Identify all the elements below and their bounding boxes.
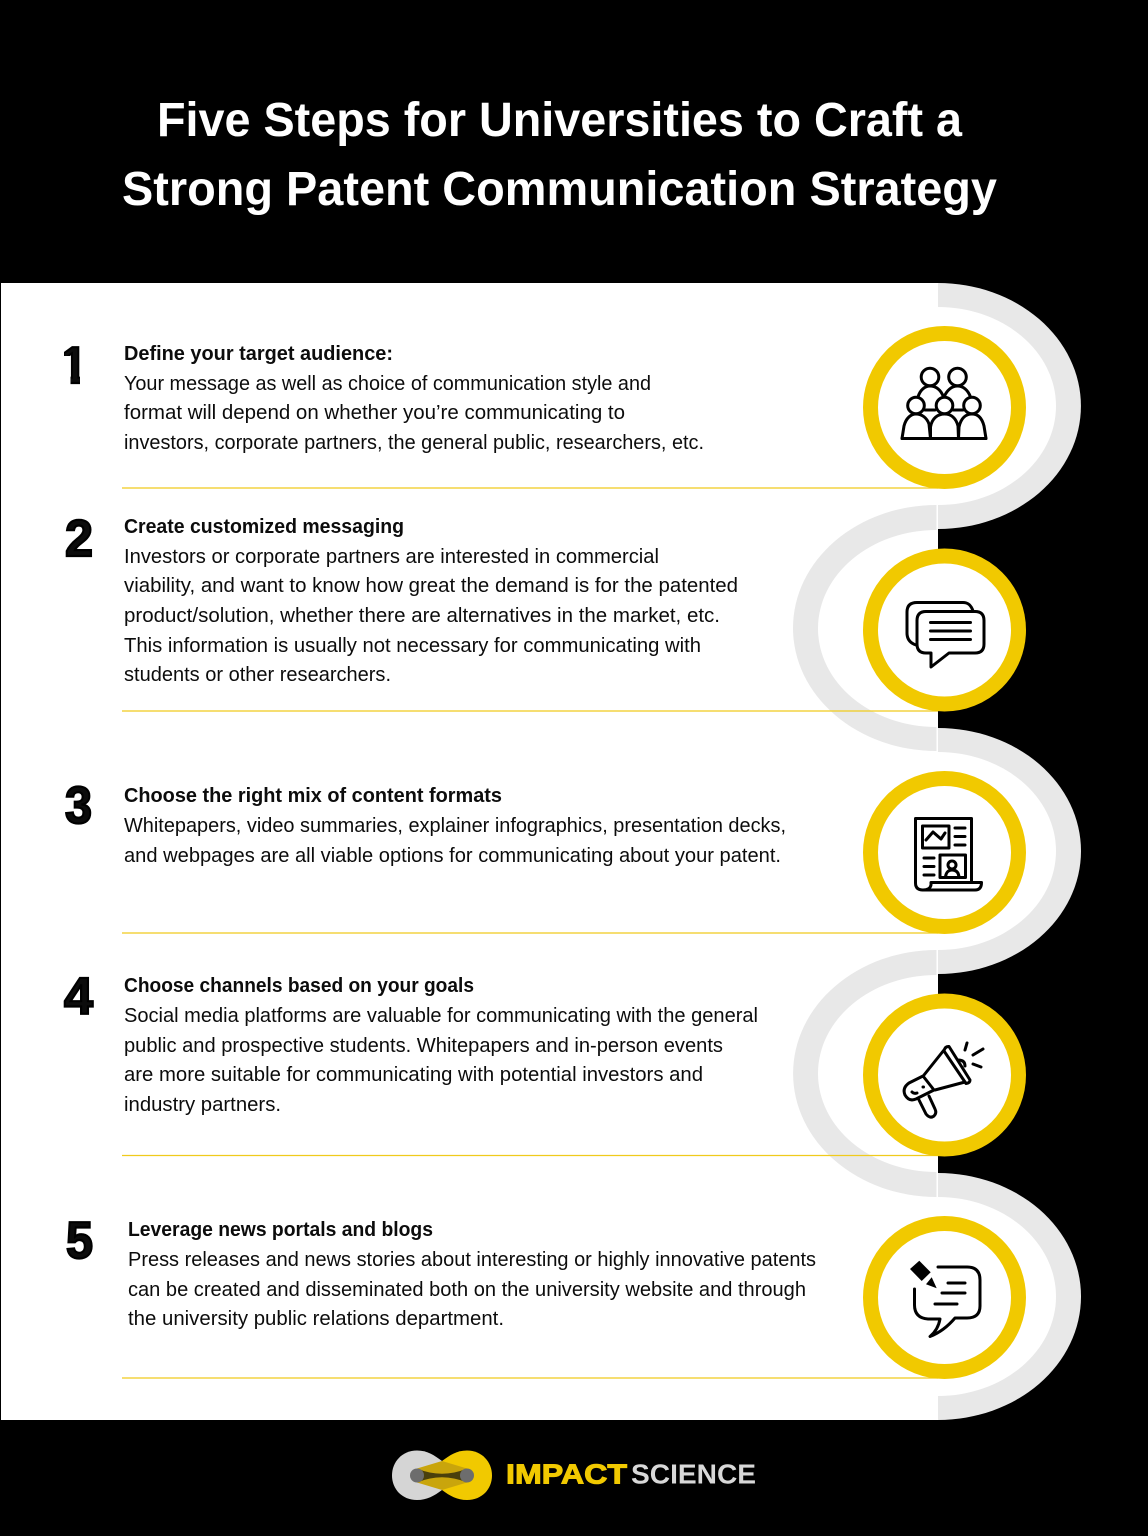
logo wordmark: IMPACT [506,1458,627,1490]
step 3 body [124,815,786,867]
ring 4 [870,1001,1018,1149]
step 2 body: viability, and want to know how great the demand is for the patented [124,575,738,597]
number 2: 2 [65,510,93,568]
step 2 body: Investors or corporate partners are interested in commercial [124,546,659,568]
step 4 body: are more suitable for communicating with potential investors and [124,1064,703,1086]
step 3 [65,777,786,867]
icon: chat bubbles [907,602,984,667]
step 4 body [124,1005,758,1116]
logo mark [392,1450,492,1500]
step 2 body: product/solution, whether there are alternatives in the market, etc. [124,605,720,627]
ring 1 [870,334,1018,482]
white content panel [1,283,938,1420]
step 3 body: and webpages are all viable options for communicating about your patent. [124,845,781,867]
step 5 body: Press releases and news stories about interesting or highly innovative patents [128,1249,816,1271]
step 5 [66,1212,816,1330]
step 2 heading: Create customized messaging [124,516,404,538]
logo wordmark: SCIENCE [631,1458,756,1490]
ring 2 [870,556,1018,704]
title: Five Steps for Universities to Craft a [157,94,962,147]
step 1 heading: Define your target audience: [124,343,393,365]
step 2 body: This information is usually not necessary for communicating with [124,635,701,657]
step 5 heading: Leverage news portals and blogs [128,1219,433,1241]
ring 3 [870,778,1018,926]
step 5 body [128,1249,816,1330]
logo wordmark [506,1458,756,1490]
step 4 [64,968,758,1116]
step 1 body: investors, corporate partners, the general public, researchers, etc. [124,432,704,454]
ring 5 [870,1224,1018,1372]
step 2 [65,510,738,686]
step 2 body [124,546,738,686]
icon: writing bubble [910,1261,980,1336]
number 4: 4 [64,968,93,1026]
logo [392,1450,756,1500]
title: Strong Patent Communication Strategy [122,163,997,216]
step 1 [61,337,704,454]
step 4 heading: Choose channels based on your goals [124,975,474,997]
step 4 body: Social media platforms are valuable for communicating with the general [124,1005,758,1027]
step 2 body: students or other researchers. [124,664,391,686]
icon: audience [902,368,986,438]
title [122,94,997,216]
step 3 heading: Choose the right mix of content formats [124,785,502,807]
step 1 body: Your message as well as choice of communication style and [124,373,651,395]
step 1 body: format will depend on whether you’re communicating to [124,402,625,424]
serpentine path [793,283,1081,1420]
step 3 body: Whitepapers, video summaries, explainer infographics, presentation decks, [124,815,786,837]
number 5: 5 [66,1212,93,1270]
step 4 body: industry partners. [124,1094,281,1116]
step 1 body [124,373,704,454]
icon: megaphone [904,1043,983,1117]
icon: newspaper [916,818,982,890]
step 4 body: public and prospective students. Whitepapers and in-person events [124,1035,723,1057]
step 5 body: can be created and disseminated both on the university website and through [128,1279,806,1301]
step 5 body: the university public relations department. [128,1308,504,1330]
step dividers [122,488,938,1378]
number 1: 1 [61,337,87,395]
number 3: 3 [65,777,92,835]
